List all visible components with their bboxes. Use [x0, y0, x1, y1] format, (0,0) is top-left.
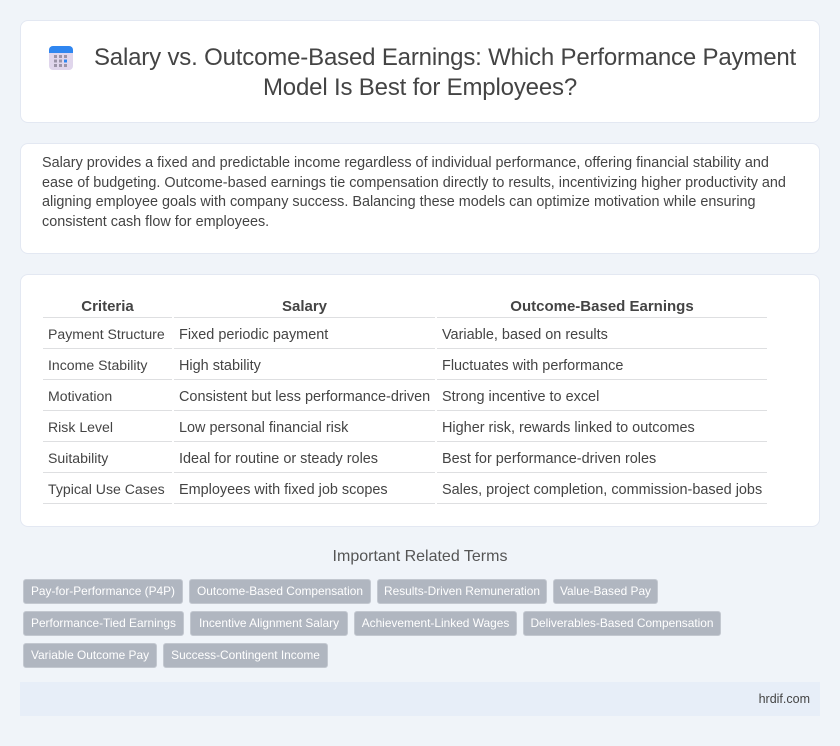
- row: risk level: Higher risk, rewards linked to outcomes: [442, 420, 695, 436]
- heading: important related terms: Important Related Terms: [333, 548, 507, 565]
- row: payment structure: Variable, based on results: [442, 327, 608, 343]
- row: income stability: Income Stability: [48, 357, 147, 373]
- tag: [23, 579, 183, 604]
- intro text line 1: Salary provides a fixed and predictable income regardless of individual performance, offering financial stability and: [42, 155, 769, 171]
- panel: introduction: [20, 143, 820, 254]
- row: motivation: Consistent but less performance-driven: [179, 389, 430, 405]
- row: risk level: Risk Level: [48, 419, 113, 435]
- footer bar: [20, 682, 820, 716]
- row: income stability: High stability: [179, 358, 261, 374]
- row: income stability: Fluctuates with performance: [442, 358, 623, 374]
- row: motivation: [48, 388, 599, 405]
- row: suitability: [48, 450, 656, 467]
- table header: outcome-based earnings: Outcome-Based Earnings: [510, 298, 694, 315]
- row: income stability: [48, 357, 623, 374]
- row: motivation: Motivation: [48, 388, 112, 404]
- row: motivation: Strong incentive to excel: [442, 389, 599, 405]
- tag: Variable Outcome Pay: [31, 648, 149, 662]
- tag: [354, 611, 517, 636]
- panel: comparison table: [20, 274, 820, 527]
- intro text line 4: consistent cash flow for employees.: [42, 214, 269, 230]
- intro text line 3: aligning employee goals with company success. Balancing these models can optimize motivation while ensuring: [42, 194, 756, 210]
- tag: Success-Contingent Income: [171, 648, 320, 662]
- tag: Deliverables-Based Compensation: [530, 616, 714, 630]
- table header: salary: Salary: [282, 298, 327, 315]
- row: payment structure: [48, 326, 608, 343]
- tag: Value-Based Pay: [560, 584, 651, 598]
- tag: Incentive Alignment Salary: [199, 616, 339, 630]
- row: typical use cases: [48, 481, 762, 498]
- row: suitability: Ideal for routine or steady roles: [179, 451, 378, 467]
- tag: [553, 579, 658, 604]
- title line 2: Model Is Best for Employees?: [263, 74, 577, 101]
- table header: criteria: Criteria: [81, 298, 134, 315]
- row: risk level: [48, 419, 695, 436]
- row: payment structure: Payment Structure: [48, 326, 165, 342]
- intro text line 2: ease of budgeting. Outcome-based earnings tie compensation directly to results, incentivizing higher productivity and: [42, 175, 786, 191]
- row: risk level: Low personal financial risk: [179, 420, 348, 436]
- tag: Results-Driven Remuneration: [384, 584, 540, 598]
- tag: [23, 643, 157, 668]
- tag: Pay-for-Performance (P4P): [31, 584, 175, 598]
- tag: [189, 579, 371, 604]
- row: suitability: Suitability: [48, 450, 108, 466]
- row: payment structure: Fixed periodic payment: [179, 327, 328, 343]
- tag: Performance-Tied Earnings: [31, 616, 176, 630]
- tag: [190, 611, 348, 636]
- icon: calendar: [49, 46, 73, 70]
- tag: [523, 611, 721, 636]
- tag: [23, 611, 184, 636]
- tag: Outcome-Based Compensation: [197, 584, 363, 598]
- row: typical use cases: Sales, project completion, commission-based jobs: [442, 482, 762, 498]
- row: typical use cases: Employees with fixed job scopes: [179, 482, 388, 498]
- tag: [163, 643, 328, 668]
- tag: Achievement-Linked Wages: [362, 616, 509, 630]
- row: typical use cases: Typical Use Cases: [48, 481, 165, 497]
- footer credit: hrdif.com: [759, 692, 810, 706]
- panel: header: [20, 20, 820, 123]
- title line 1: Salary vs. Outcome-Based Earnings: Which Performance Payment: [94, 44, 796, 71]
- row: suitability: Best for performance-driven roles: [442, 451, 656, 467]
- tag: [377, 579, 547, 604]
